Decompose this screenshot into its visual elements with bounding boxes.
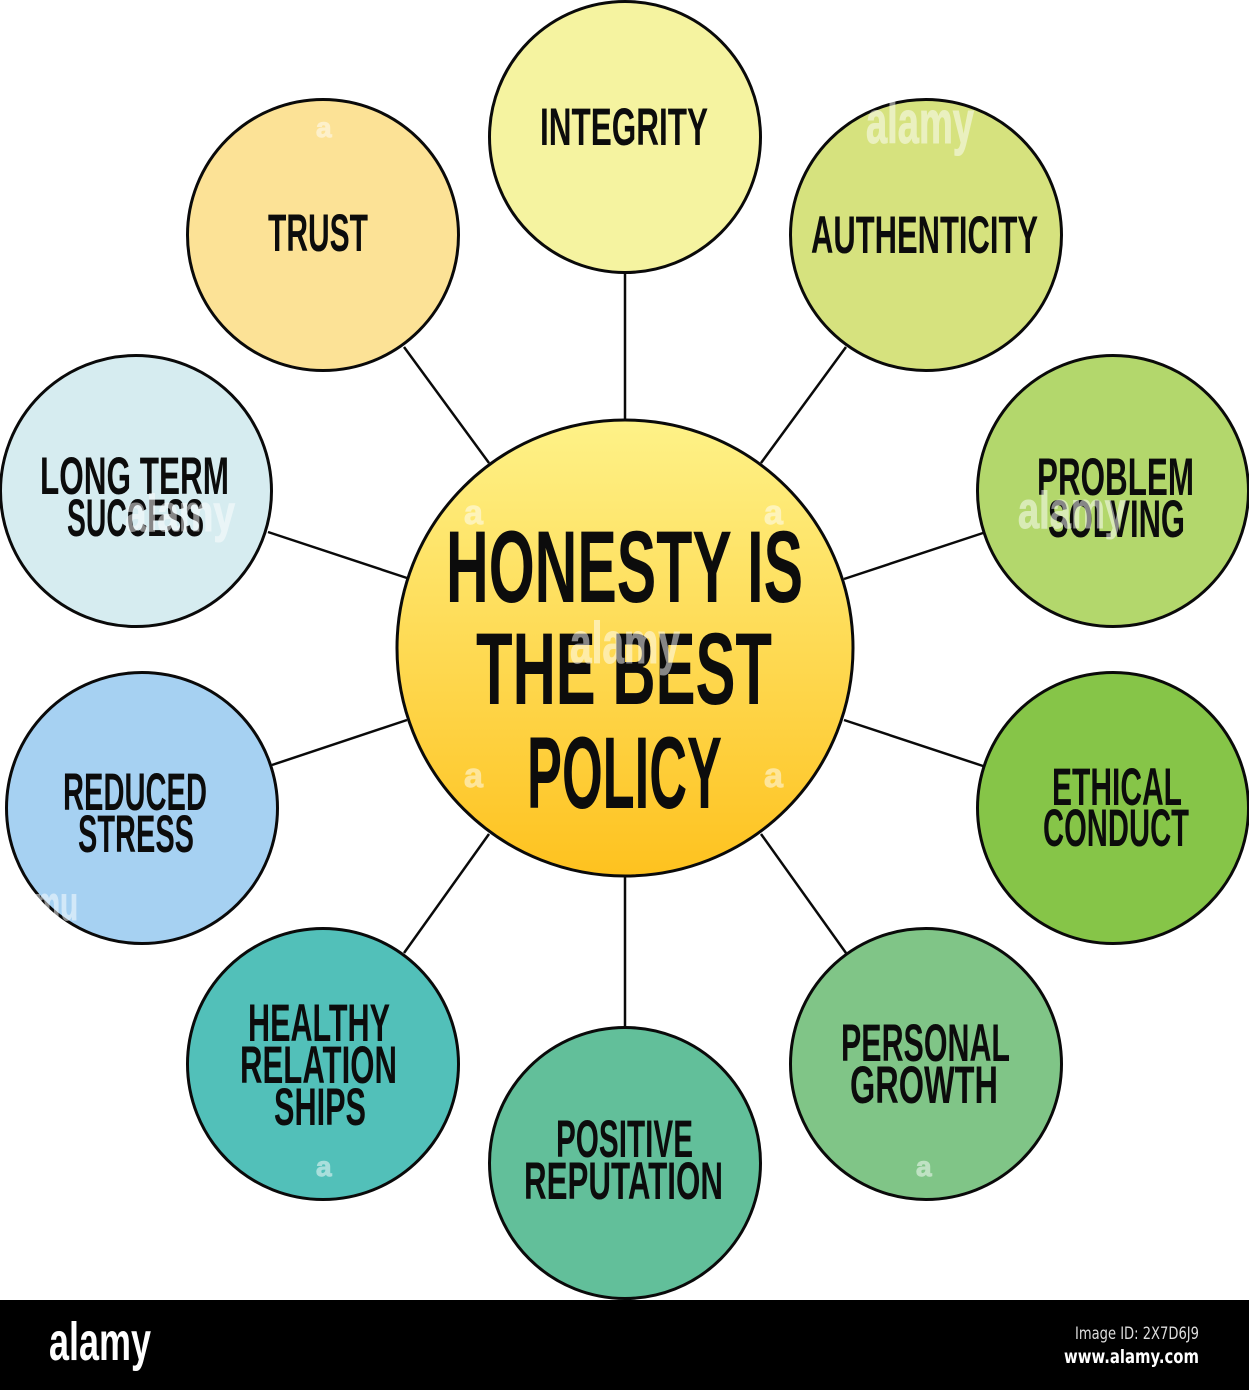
node: positive reputation: REPUTATION <box>524 1152 723 1211</box>
central circle: honesty is the best policy: a <box>464 757 484 795</box>
node: authenticity: AUTHENTICITY <box>811 206 1038 265</box>
central circle: honesty is the best policy: alamy <box>570 611 680 676</box>
central circle: honesty is the best policy <box>397 420 853 876</box>
node: healthy relationships: SHIPS <box>274 1078 366 1137</box>
node: healthy relationships: RELATION <box>240 1036 397 1095</box>
central circle: honesty is the best policy: POLICY <box>527 716 722 830</box>
node: reduced stress: REDUCED <box>63 763 207 822</box>
node: reduced stress <box>6 672 278 944</box>
node: personal growth: GROWTH <box>850 1056 998 1115</box>
node: healthy relationships <box>188 928 458 1200</box>
node: trust: TRUST <box>268 204 368 263</box>
footer bar <box>0 1300 1249 1390</box>
node: problem solving: alamy <box>1018 482 1126 540</box>
node: personal growth <box>790 928 1062 1200</box>
node: problem solving <box>978 356 1248 626</box>
node: long term success: LONG TERM <box>40 447 229 506</box>
central circle: honesty is the best policy: HONESTY IS <box>446 510 803 624</box>
central circle: honesty is the best policy: THE BEST <box>476 612 772 726</box>
footer logo: alamy <box>49 1312 151 1372</box>
node: positive reputation <box>490 1028 760 1298</box>
node: ethical conduct <box>978 672 1248 944</box>
central circle: honesty is the best policy: a <box>764 757 784 795</box>
connector lines <box>268 272 983 1027</box>
node: positive reputation: POSITIVE <box>556 1110 693 1169</box>
node: healthy relationships: HEALTHY <box>248 994 390 1053</box>
node: authenticity <box>790 89 1062 370</box>
node: integrity <box>490 2 760 272</box>
node: trust: a <box>316 112 332 143</box>
image id: Image ID: 2X7D6J9 <box>1075 1324 1199 1344</box>
node: trust <box>188 100 458 370</box>
website: www.alamy.com <box>1064 1346 1199 1368</box>
node: personal growth: PERSONAL <box>841 1014 1010 1073</box>
node: long term success <box>0 356 272 626</box>
node: long term success: SUCCESS <box>67 489 204 548</box>
node: integrity: INTEGRITY <box>540 98 708 157</box>
node: authenticity: alamy <box>866 89 974 156</box>
node: personal growth: a <box>916 1151 932 1182</box>
central circle: honesty is the best policy: a <box>764 494 784 532</box>
node: long term success: alamy <box>125 485 235 543</box>
node: healthy relationships: a <box>316 1151 332 1182</box>
node: reduced stress: STRESS <box>78 805 194 864</box>
central circle: honesty is the best policy: a <box>464 494 484 532</box>
node: reduced stress: mu <box>34 878 78 931</box>
